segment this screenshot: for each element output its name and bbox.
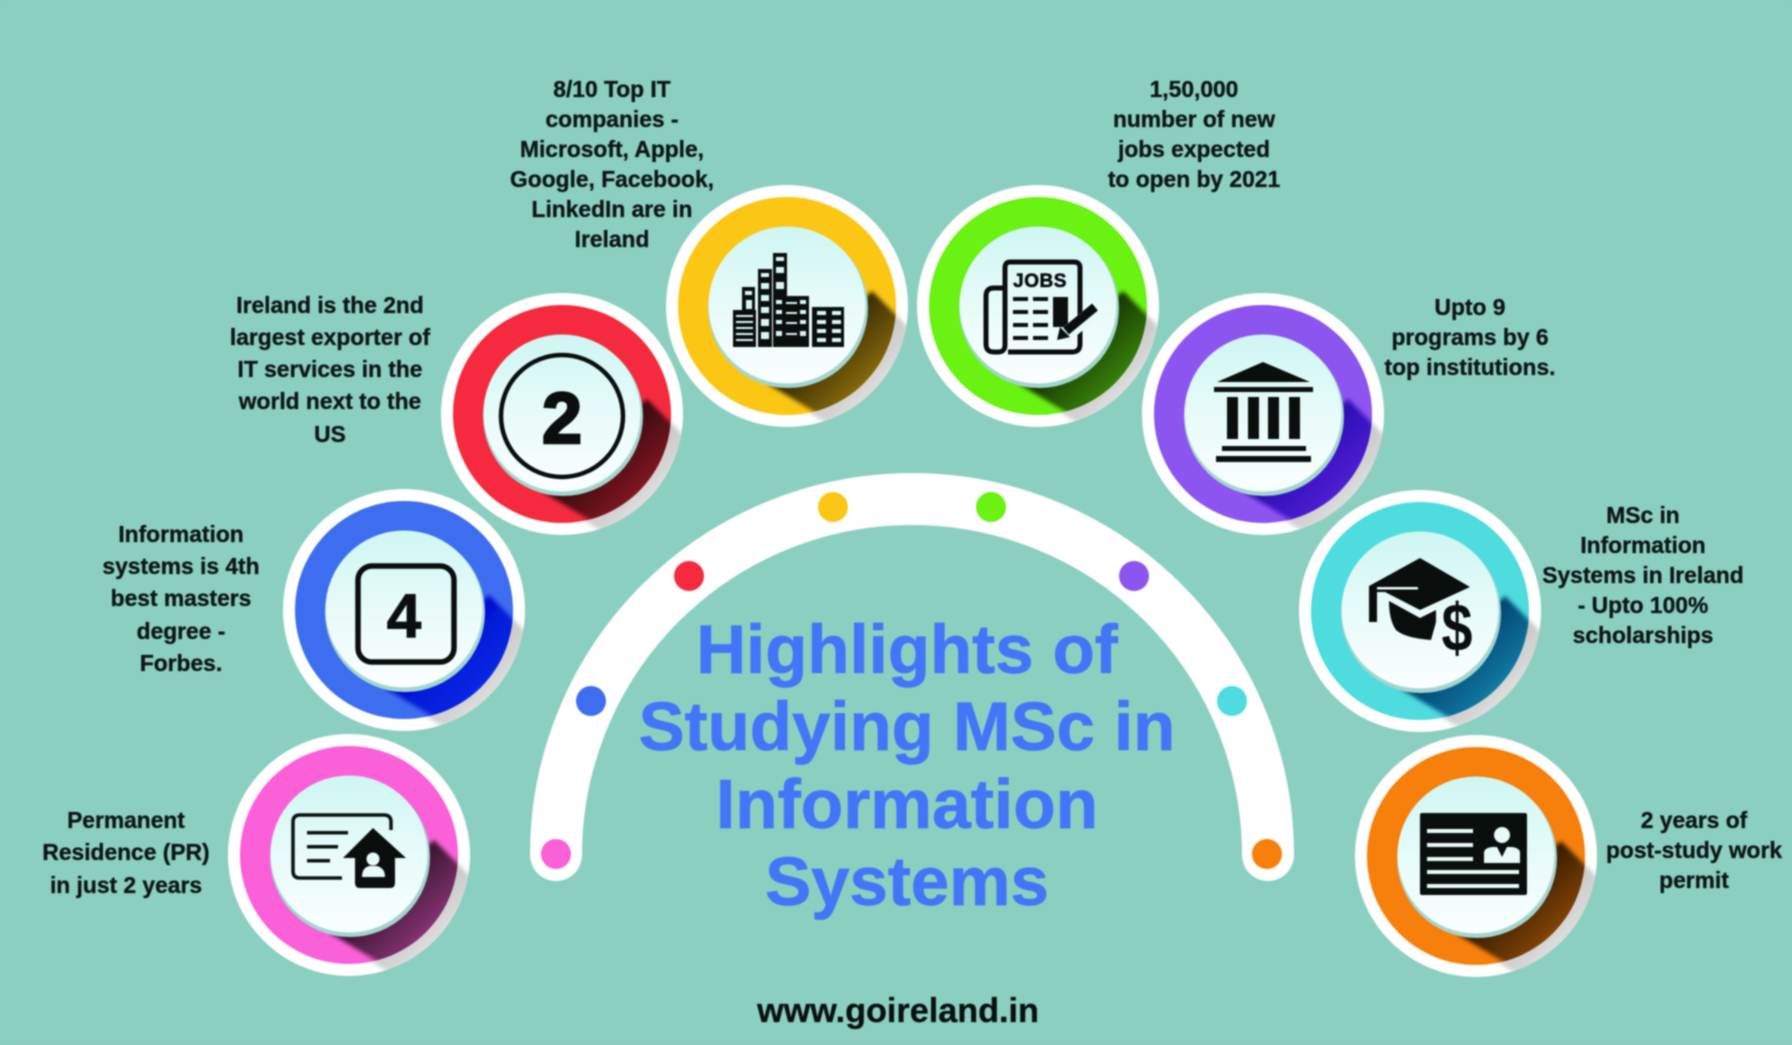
- icon: jobs newspaper: JOBS: [1013, 271, 1067, 292]
- text: masters degree: Forbes.: [140, 650, 222, 676]
- badge: cyan scholarships: [1298, 489, 1542, 733]
- icon: id card: [1420, 813, 1527, 895]
- text: scholarships: Information: [1580, 532, 1706, 558]
- text: permanent residence: Permanent: [67, 807, 185, 833]
- icon: institution building: [1214, 362, 1313, 462]
- badge: pink permanent residence: [227, 733, 471, 977]
- text: new jobs: number of new: [1113, 106, 1275, 132]
- title: [639, 611, 1175, 920]
- badge: green jobs: [916, 184, 1160, 428]
- icon: jobs newspaper: [986, 262, 1097, 352]
- text: 8/10 top IT companies: Google, Facebook,: [510, 166, 714, 192]
- icon: graduation cap with dollar: [1369, 558, 1473, 666]
- text: 8/10 top IT companies: 8/10 Top IT: [553, 76, 671, 102]
- text: new jobs: 1,50,000: [1150, 76, 1238, 102]
- icon: circled 2: 2: [542, 379, 582, 459]
- icon: circled 2: [501, 355, 623, 477]
- badge: blue number 4: [282, 488, 526, 732]
- text: scholarships: - Upto 100%: [1578, 592, 1708, 618]
- text: scholarships: MSc in: [1606, 502, 1680, 528]
- text: permanent residence: in just 2 years: [50, 872, 202, 898]
- text: IT exporter: IT services in the: [238, 356, 422, 382]
- text: IT exporter: US: [314, 421, 346, 447]
- text: scholarships: [1542, 502, 1744, 648]
- text: permanent residence: [42, 807, 210, 898]
- text: work permit: [1606, 807, 1782, 893]
- text: masters degree: degree -: [137, 618, 225, 644]
- text: masters degree: Information: [118, 521, 244, 547]
- text: 8/10 top IT companies: [510, 76, 714, 252]
- text: scholarships: scholarships: [1573, 622, 1713, 648]
- text: new jobs: to open by 2021: [1108, 166, 1280, 192]
- text: IT exporter: world next to the: [238, 388, 421, 414]
- text: 8/10 top IT companies: Ireland: [575, 226, 649, 252]
- text: new jobs: [1108, 76, 1280, 192]
- icon: graduation cap with dollar: $: [1441, 591, 1473, 666]
- text: work permit: 2 years of: [1641, 807, 1748, 833]
- title: Information: [716, 765, 1098, 843]
- text: 8/10 top IT companies: LinkedIn are in: [532, 196, 692, 222]
- central arc with dots: [541, 492, 1282, 869]
- icon: city buildings: [733, 253, 844, 347]
- text: programs: [1385, 294, 1555, 380]
- text: programs: Upto 9: [1435, 294, 1505, 320]
- badge: purple institutions: [1141, 292, 1385, 536]
- icon: boxed 4: 4: [387, 582, 422, 651]
- text: 8/10 top IT companies: companies -: [545, 106, 679, 132]
- website url: www.goireland.in: [756, 992, 1039, 1030]
- badge: red number 2: [440, 292, 684, 536]
- title: Systems: [765, 843, 1049, 920]
- text: permanent residence: Residence (PR): [42, 839, 210, 865]
- text: 8/10 top IT companies: Microsoft, Apple,: [520, 136, 704, 162]
- text: IT exporter: largest exporter of: [230, 324, 430, 350]
- text: IT exporter: [230, 292, 430, 447]
- badge: orange work permit: [1354, 734, 1598, 978]
- title: Highlights of: [696, 611, 1119, 688]
- text: work permit: post-study work: [1606, 837, 1782, 863]
- text: work permit: permit: [1659, 867, 1729, 893]
- text: programs: top institutions.: [1385, 354, 1555, 380]
- icon: boxed 4: [358, 566, 454, 662]
- text: programs: programs by 6: [1391, 324, 1549, 350]
- text: masters degree: [102, 521, 260, 676]
- text: new jobs: jobs expected: [1117, 136, 1270, 162]
- icon: card with house: [293, 815, 406, 888]
- badge: yellow companies: [665, 184, 909, 428]
- title: Studying MSc in: [639, 688, 1175, 765]
- text: masters degree: systems is 4th: [102, 553, 260, 579]
- text: IT exporter: Ireland is the 2nd: [236, 292, 424, 318]
- text: scholarships: Systems in Ireland: [1542, 562, 1744, 588]
- text: masters degree: best masters: [111, 585, 251, 611]
